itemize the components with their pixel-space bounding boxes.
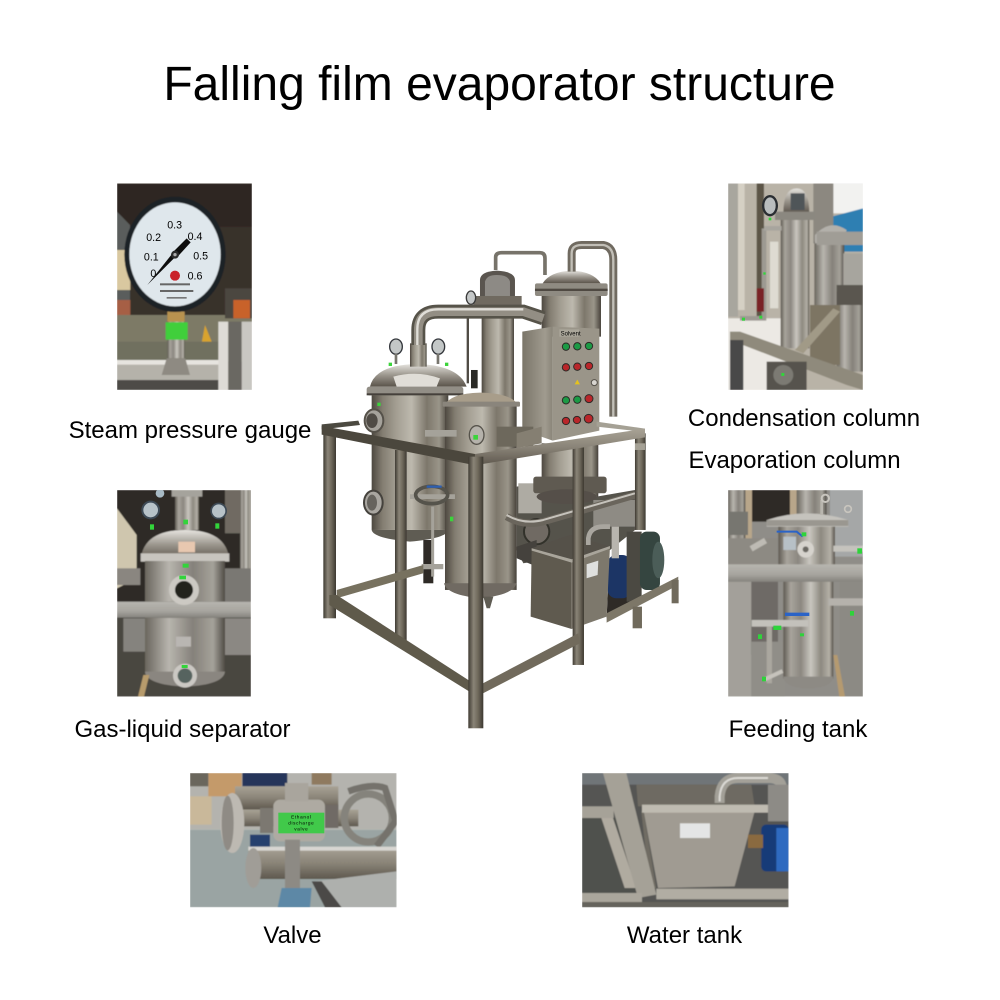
label: feeding tank: Feeding tank xyxy=(729,716,868,743)
photo: water tank xyxy=(582,773,789,907)
photo: steam pressure gauge: 0.5 xyxy=(193,251,208,263)
photo: steam pressure gauge: 0.4 xyxy=(188,231,202,243)
discharge pipe xyxy=(507,493,635,523)
valves on feeding line xyxy=(410,433,457,577)
label: valve: Valve xyxy=(263,922,322,949)
label: condensation column: Condensation column xyxy=(688,405,920,432)
photo: gas-liquid separator xyxy=(117,489,251,697)
water tank xyxy=(531,527,619,629)
photo: steam pressure gauge: 0 xyxy=(150,268,156,280)
label: evaporation column: Evaporation column xyxy=(688,447,901,474)
photo: steam pressure gauge: 0.1 xyxy=(144,251,159,263)
control box: Solvent xyxy=(561,331,581,337)
pump and motor assembly xyxy=(517,477,679,628)
photo: valve: valve xyxy=(294,827,308,832)
support frame xyxy=(322,421,646,728)
photo: steam pressure gauge xyxy=(117,183,252,390)
label: steam pressure gauge: Steam pressure gauge xyxy=(69,417,311,444)
photo: valve: Ethanol xyxy=(291,815,312,820)
photo: condensation column xyxy=(728,183,863,390)
photo: valve: discharge xyxy=(288,821,314,826)
condensation column xyxy=(466,253,545,405)
large gas-liquid separator vessel xyxy=(364,339,467,583)
photo: steam pressure gauge: 0.2 xyxy=(146,232,161,244)
label: water tank: Water tank xyxy=(627,922,743,949)
control box xyxy=(522,327,599,441)
photo: feeding tank xyxy=(728,490,863,697)
label: gas-liquid separator: Gas-liquid separator xyxy=(74,716,291,743)
photo: steam pressure gauge: 0.3 xyxy=(167,219,182,231)
main machine: falling film evaporator xyxy=(322,245,679,728)
title: Falling film evaporator structure xyxy=(163,58,836,111)
photo: steam pressure gauge: 0.6 xyxy=(188,271,202,283)
evaporation column xyxy=(535,245,613,497)
photo: valve xyxy=(190,773,397,907)
feeding tank vessel xyxy=(443,393,542,608)
steam connecting pipe xyxy=(417,309,543,345)
